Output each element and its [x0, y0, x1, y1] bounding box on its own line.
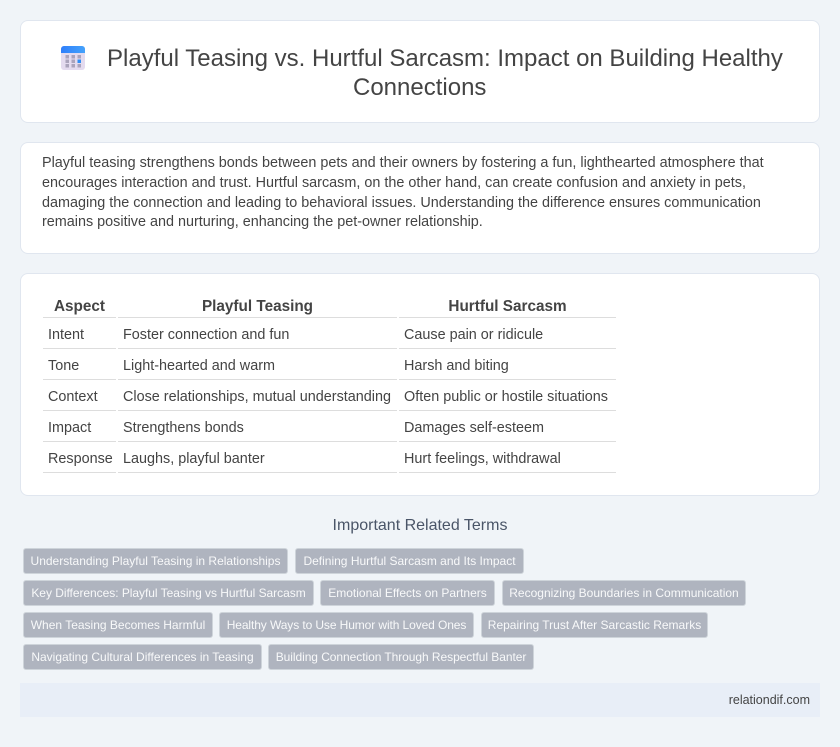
tag: Building Connection Through Respectful Banter	[276, 650, 526, 664]
title: Playful Teasing vs. Hurtful Sarcasm: Impact on Building Healthy	[107, 45, 783, 72]
row: response: Hurt feelings, withdrawal	[404, 451, 561, 467]
row: context: Often public or hostile situations	[404, 389, 608, 405]
row: impact: Strengthens bonds	[123, 420, 244, 436]
column headers: Aspect	[54, 298, 105, 315]
row: intent	[48, 327, 543, 343]
column headers	[54, 298, 567, 315]
tag: Healthy Ways to Use Humor with Loved Ones	[227, 618, 466, 632]
row: response: Response	[48, 451, 113, 467]
tag	[481, 612, 708, 638]
column headers: Playful Teasing	[202, 298, 313, 315]
row: tone	[48, 358, 509, 374]
tag: Recognizing Boundaries in Communication	[509, 586, 739, 600]
tag	[502, 580, 746, 606]
icon: calendar	[61, 46, 85, 70]
tag: When Teasing Becomes Harmful	[31, 618, 205, 632]
tag: Emotional Effects on Partners	[328, 586, 487, 600]
tag	[23, 548, 288, 574]
panel: header card	[20, 20, 820, 123]
row: response	[48, 451, 561, 467]
tag	[23, 612, 213, 638]
row: impact	[48, 420, 544, 436]
tag: Defining Hurtful Sarcasm and Its Impact	[303, 554, 516, 568]
tag	[295, 548, 524, 574]
intro text	[42, 155, 764, 230]
row: context: Close relationships, mutual understanding	[123, 389, 391, 405]
footer source: relationdif.com	[729, 693, 810, 707]
tag: Understanding Playful Teasing in Relationships	[31, 554, 280, 568]
footer bar	[20, 683, 820, 717]
intro text: encourages interaction and trust. Hurtful sarcasm, on the other hand, can create confusion and anxiety in pets,	[42, 175, 746, 191]
related term tags	[23, 548, 746, 670]
row: intent: Foster connection and fun	[123, 327, 289, 343]
tag: Repairing Trust After Sarcastic Remarks	[488, 618, 701, 632]
column headers: Hurtful Sarcasm	[448, 298, 567, 315]
tag: Navigating Cultural Differences in Teasing	[31, 650, 254, 664]
panel: comparison table	[20, 273, 820, 496]
heading: related terms: Important Related Terms	[333, 517, 507, 534]
row: tone: Harsh and biting	[404, 358, 509, 374]
panel: introduction	[20, 142, 820, 254]
intro text: Playful teasing strengthens bonds between pets and their owners by fostering a fun, lighthearted atmosphere that	[42, 155, 764, 171]
tag	[219, 612, 474, 638]
comparison table	[43, 298, 616, 473]
tag	[23, 580, 314, 606]
row: intent: Intent	[48, 327, 84, 343]
row: response: Laughs, playful banter	[123, 451, 265, 467]
intro text: damaging the connection and leading to behavioral issues. Understanding the difference ensures communication	[42, 195, 761, 211]
row: tone: Light-hearted and warm	[123, 358, 275, 374]
title	[107, 45, 783, 101]
row: context	[48, 389, 608, 405]
intro text: remains positive and nurturing, enhancing the pet-owner relationship.	[42, 214, 483, 230]
row: impact: Impact	[48, 420, 91, 436]
row: intent: Cause pain or ridicule	[404, 327, 543, 343]
row: impact: Damages self-esteem	[404, 420, 544, 436]
row: context: Context	[48, 389, 98, 405]
tag	[268, 644, 534, 670]
tag	[320, 580, 495, 606]
tag	[23, 644, 262, 670]
title: Connections	[353, 74, 486, 101]
row: tone: Tone	[48, 358, 79, 374]
tag: Key Differences: Playful Teasing vs Hurtful Sarcasm	[31, 586, 306, 600]
